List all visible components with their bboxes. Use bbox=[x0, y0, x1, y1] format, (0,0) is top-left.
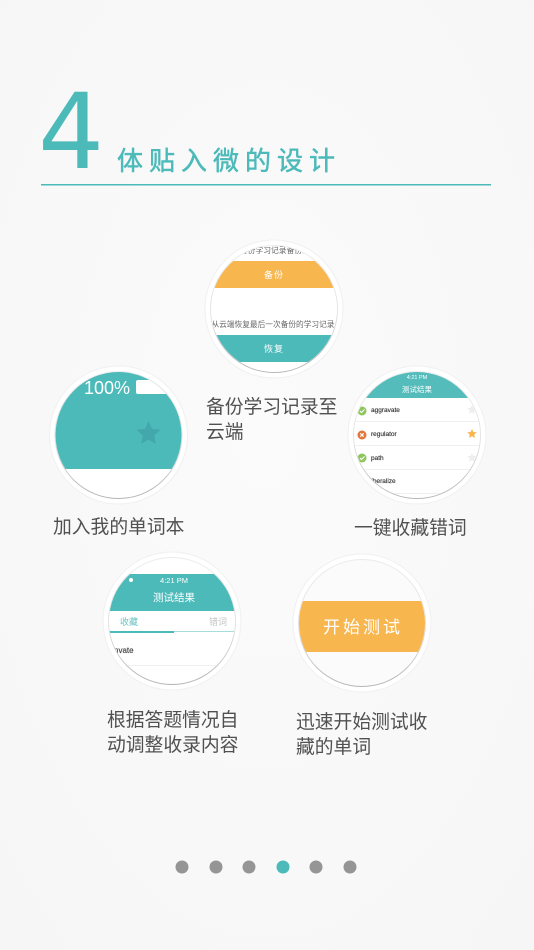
screenshot: test result list: 测试结果 bbox=[402, 384, 432, 394]
screenshot: test result list: liberalize bbox=[370, 478, 396, 485]
caption: 根据答题情况自 bbox=[107, 709, 238, 730]
screenshot: backup screen: 从云端恢复最后一次备份的学习记录 bbox=[211, 319, 335, 329]
header rule bbox=[41, 184, 491, 186]
screenshot: teal header with star bbox=[50, 370, 187, 469]
caption line 2: 云端 bbox=[206, 421, 244, 442]
header: number and title bbox=[38, 71, 491, 193]
screenshot: start test button bbox=[295, 601, 430, 652]
panel: add to my wordbook bbox=[50, 366, 188, 537]
screenshot: tabs: nvate bbox=[114, 646, 134, 655]
screenshot: start test button: 开始测试 bbox=[323, 618, 403, 637]
row words: aggravate bbox=[371, 407, 400, 414]
panel: one-tap favourite wrong words bbox=[348, 366, 486, 538]
caption: 加入我的单词本 bbox=[53, 516, 185, 537]
panel: backup to cloud bbox=[205, 240, 345, 417]
page indicator dots bbox=[176, 860, 356, 874]
screenshot: test result list: regulator bbox=[371, 431, 397, 438]
panel: auto-adjust collection bbox=[103, 552, 241, 730]
big number 4: 4 bbox=[38, 71, 104, 193]
screenshot: test result list bbox=[350, 370, 485, 498]
screenshot: teal header with star: 100% bbox=[84, 378, 130, 398]
caption line 2: 藏的单词 bbox=[296, 736, 371, 757]
panel: start test bbox=[293, 554, 431, 732]
caption: 备份学习记录至 bbox=[206, 396, 337, 417]
screenshot: tabs: 收藏 bbox=[120, 616, 138, 627]
screenshot: tabs: 测试结果 bbox=[153, 591, 195, 604]
screenshot: backup screen: 备份 bbox=[264, 269, 284, 280]
caption line 2: 动调整收录内容 bbox=[107, 734, 239, 755]
caption: 迅速开始测试收 bbox=[296, 711, 428, 732]
screenshot: backup screen bbox=[213, 246, 334, 372]
screenshot: tabs bbox=[105, 574, 240, 666]
screenshot: tabs: 4:21 PM bbox=[160, 576, 188, 585]
screenshot: backup screen: 从云端备份学习记录备份到云端 bbox=[216, 245, 326, 255]
row icons bbox=[358, 406, 366, 416]
screenshot: test result list: 4:21 PM bbox=[407, 375, 428, 381]
title: 体贴入微的设计 bbox=[117, 141, 341, 178]
screenshot: test result list: path bbox=[371, 455, 384, 462]
screenshot: tabs: 错词 bbox=[209, 616, 227, 627]
screenshot: backup screen: 恢复 bbox=[264, 343, 284, 354]
caption: 一键收藏错词 bbox=[354, 517, 467, 538]
stars bbox=[468, 406, 475, 414]
